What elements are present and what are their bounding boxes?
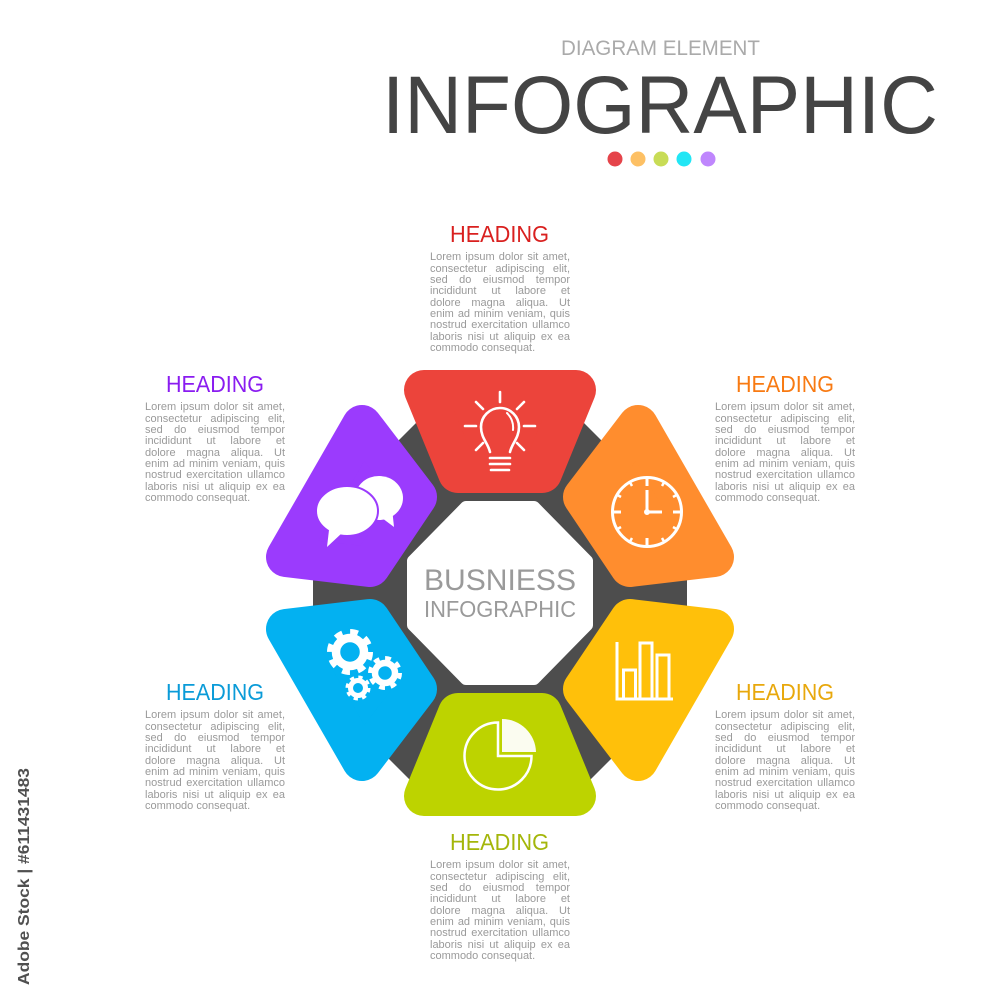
segment: orange [583,425,714,567]
text block: lower right: laboris nisi ut aliquip ex ea [715,789,855,801]
icon: gears [330,632,400,699]
text block: upper left: laboris nisi ut aliquip ex ea [145,481,285,493]
segment: red [424,390,576,473]
text block: upper right: Lorem ipsum dolor sit amet, [715,401,855,413]
text block: lower right: nostrud exercitation ullamco [715,777,855,789]
title: INFOGRAPHIC [382,60,938,151]
text block: top: nostrud exercitation ullamco [430,319,570,331]
text block: upper right: dolore magna aliqua. Ut [715,447,855,459]
centre octagon [413,507,587,679]
text block: bottom: sed do eiusmod tempor [430,882,570,894]
text block: upper left: enim ad minim veniam, quis [145,458,285,470]
text block: upper right: consectetur adipiscing elit, [715,413,855,425]
text block: upper left: Lorem ipsum dolor sit amet, [145,401,285,413]
text block: lower left: Lorem ipsum dolor sit amet, [145,709,285,721]
icon: bar chart [617,642,673,699]
text block: lower right [715,709,855,812]
text block: bottom: enim ad minim veniam, quis [430,916,570,928]
text block: lower right: sed do eiusmod tempor [715,732,855,744]
segment: purple [286,425,417,567]
text block: upper right [715,401,855,504]
heading: upper right: HEADING [736,371,834,397]
segment: blue [286,619,417,761]
text block: upper right: incididunt ut labore et [715,435,855,447]
icon: pie chart [464,719,536,790]
text block: lower left: commodo consequat. [145,800,250,812]
text block: lower left: enim ad minim veniam, quis [145,766,285,778]
text block: top: Lorem ipsum dolor sit amet, [430,251,570,263]
text block: top: consectetur adipiscing elit, [430,263,570,275]
heading: bottom: HEADING [450,829,549,855]
colour dots [608,152,716,166]
icon: speech bubbles [316,476,403,547]
text block: upper right: enim ad minim veniam, quis [715,458,855,470]
text block: top: dolore magna aliqua. Ut [430,297,570,309]
text block: lower right: dolore magna aliqua. Ut [715,755,855,767]
text block: lower left: sed do eiusmod tempor [145,732,285,744]
text block: top: laboris nisi ut aliquip ex ea [430,331,570,343]
text block: upper left: dolore magna aliqua. Ut [145,447,285,459]
text block: upper right: nostrud exercitation ullamco [715,469,855,481]
stock credit: Adobe Stock | #611431483 [16,768,33,985]
text block: upper right: commodo consequat. [715,492,820,504]
text block: lower right: commodo consequat. [715,800,820,812]
dark octagon backdrop [313,409,687,780]
text block: bottom: laboris nisi ut aliquip ex ea [430,939,570,951]
text block: lower left: incididunt ut labore et [145,743,285,755]
text block: bottom: dolore magna aliqua. Ut [430,905,570,917]
text block: bottom: nostrud exercitation ullamco [430,927,570,939]
centre label: INFOGRAPHIC [424,596,576,622]
text block: lower right: incididunt ut labore et [715,743,855,755]
text block: upper left: incididunt ut labore et [145,435,285,447]
text block: lower right: enim ad minim veniam, quis [715,766,855,778]
text block: lower left: consectetur adipiscing elit, [145,721,285,733]
text block: bottom [430,859,570,962]
text block: upper right: sed do eiusmod tempor [715,424,855,436]
text block: upper left: consectetur adipiscing elit, [145,413,285,425]
text block: top: incididunt ut labore et [430,285,570,297]
segment: yellow [583,619,714,761]
text block: bottom: commodo consequat. [430,950,535,962]
segment: green [424,713,576,796]
text block: upper left: sed do eiusmod tempor [145,424,285,436]
text block: top: enim ad minim veniam, quis [430,308,570,320]
centre label [424,564,576,622]
heading: upper left: HEADING [166,371,264,397]
text block: lower left [145,709,285,812]
text block: bottom: Lorem ipsum dolor sit amet, [430,859,570,871]
text block: top: commodo consequat. [430,342,535,354]
text block: upper left [145,401,285,504]
centre label: BUSNIESS [424,564,576,597]
subtitle: DIAGRAM ELEMENT [561,37,760,60]
text block: bottom: incididunt ut labore et [430,893,570,905]
text block: upper right: laboris nisi ut aliquip ex ea [715,481,855,493]
text block: lower right: consectetur adipiscing elit, [715,721,855,733]
icon: clock [612,478,682,546]
icon: light bulb [465,392,535,470]
text block: lower right: Lorem ipsum dolor sit amet, [715,709,855,721]
text block: top [430,251,570,354]
heading: top: HEADING [450,221,549,247]
text block: lower left: dolore magna aliqua. Ut [145,755,285,767]
text block: top: sed do eiusmod tempor [430,274,570,286]
text block: lower left: nostrud exercitation ullamco [145,777,285,789]
text block: upper left: nostrud exercitation ullamco [145,469,285,481]
text block: upper left: commodo consequat. [145,492,250,504]
text block: bottom: consectetur adipiscing elit, [430,871,570,883]
heading: lower right: HEADING [736,679,834,705]
text block: lower left: laboris nisi ut aliquip ex ea [145,789,285,801]
heading: lower left: HEADING [166,679,264,705]
